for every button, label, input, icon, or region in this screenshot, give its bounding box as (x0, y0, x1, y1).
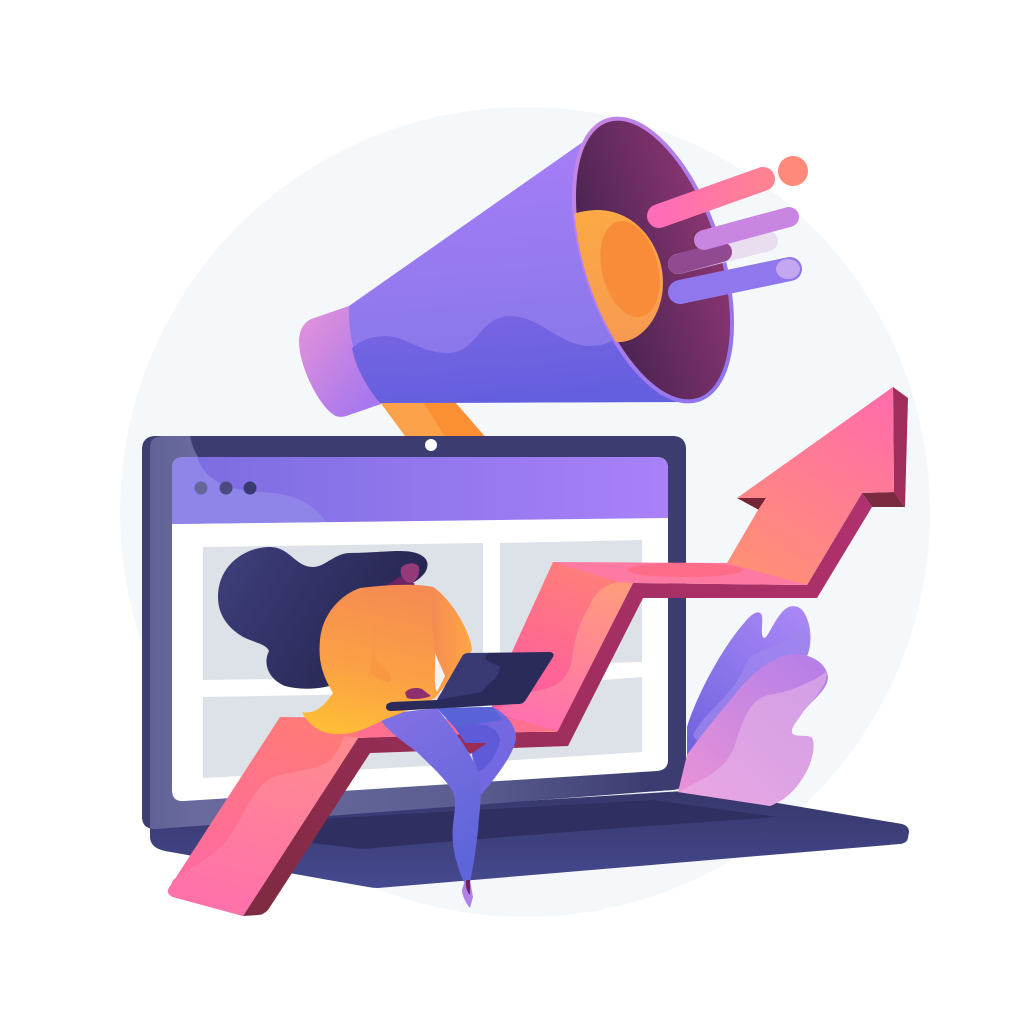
front leg (378, 708, 481, 882)
megaphone cone (349, 137, 690, 403)
back leaf highlight (693, 625, 810, 745)
orange dot (778, 156, 808, 186)
megaphone (299, 116, 734, 417)
browser header (172, 457, 668, 524)
megaphone mouthpiece (299, 306, 381, 417)
arm gap (435, 653, 445, 692)
megaphone opening (543, 99, 763, 421)
pink streak (659, 179, 763, 216)
arrow notch shadow (737, 498, 766, 510)
upper back thigh shading (437, 707, 502, 728)
screen left edge shade (142, 436, 162, 828)
small laptop (386, 652, 554, 711)
laptop base (150, 790, 909, 888)
browser header shading (172, 457, 326, 524)
hand (405, 688, 431, 699)
lower ramp highlight (168, 736, 358, 916)
back leaf (687, 606, 810, 755)
ramp orange sliver (495, 715, 557, 732)
megaphone cone shading (352, 316, 690, 403)
laptop screen (142, 436, 686, 829)
hair (218, 547, 428, 689)
small laptop highlight (437, 653, 500, 700)
upper arrow head (700, 387, 894, 585)
sweater fold (370, 612, 391, 682)
sweater (302, 585, 472, 734)
background circle (120, 107, 930, 917)
content cards (203, 540, 642, 778)
arrow seen between legs (460, 743, 487, 754)
neck (380, 576, 415, 591)
plateau shading (627, 563, 743, 577)
lower plateau (280, 717, 558, 738)
arrow side face (243, 493, 872, 916)
shoe (462, 880, 473, 908)
arrow plateau (553, 562, 807, 585)
streak end highlight (776, 259, 800, 279)
woman with laptop (218, 547, 554, 908)
face (401, 563, 419, 583)
ankle (466, 880, 470, 895)
screen frame (142, 436, 686, 829)
screen display (172, 457, 668, 801)
arrow step shadow (862, 492, 905, 507)
arrow head side (893, 387, 908, 507)
blue streak (680, 269, 790, 292)
plant leaves (678, 606, 828, 806)
middle ramp highlight (495, 582, 633, 732)
back leg (437, 707, 516, 795)
megaphone speaker (574, 210, 663, 342)
lilac streak (704, 217, 789, 240)
laptop keyboard recess (300, 800, 777, 849)
front leaf (678, 654, 828, 806)
lower ramp (168, 717, 360, 916)
growth arrow (168, 387, 908, 916)
middle ramp (490, 562, 633, 732)
knee shading (455, 724, 500, 772)
sleeve shading (432, 587, 472, 680)
browser dots (194, 482, 256, 494)
sound streaks (659, 156, 808, 292)
camera (425, 439, 437, 451)
megaphone stand (380, 402, 488, 440)
front leaf highlight (678, 672, 826, 806)
illustration: marketing growth scene (120, 107, 930, 917)
faint streak (678, 241, 768, 264)
